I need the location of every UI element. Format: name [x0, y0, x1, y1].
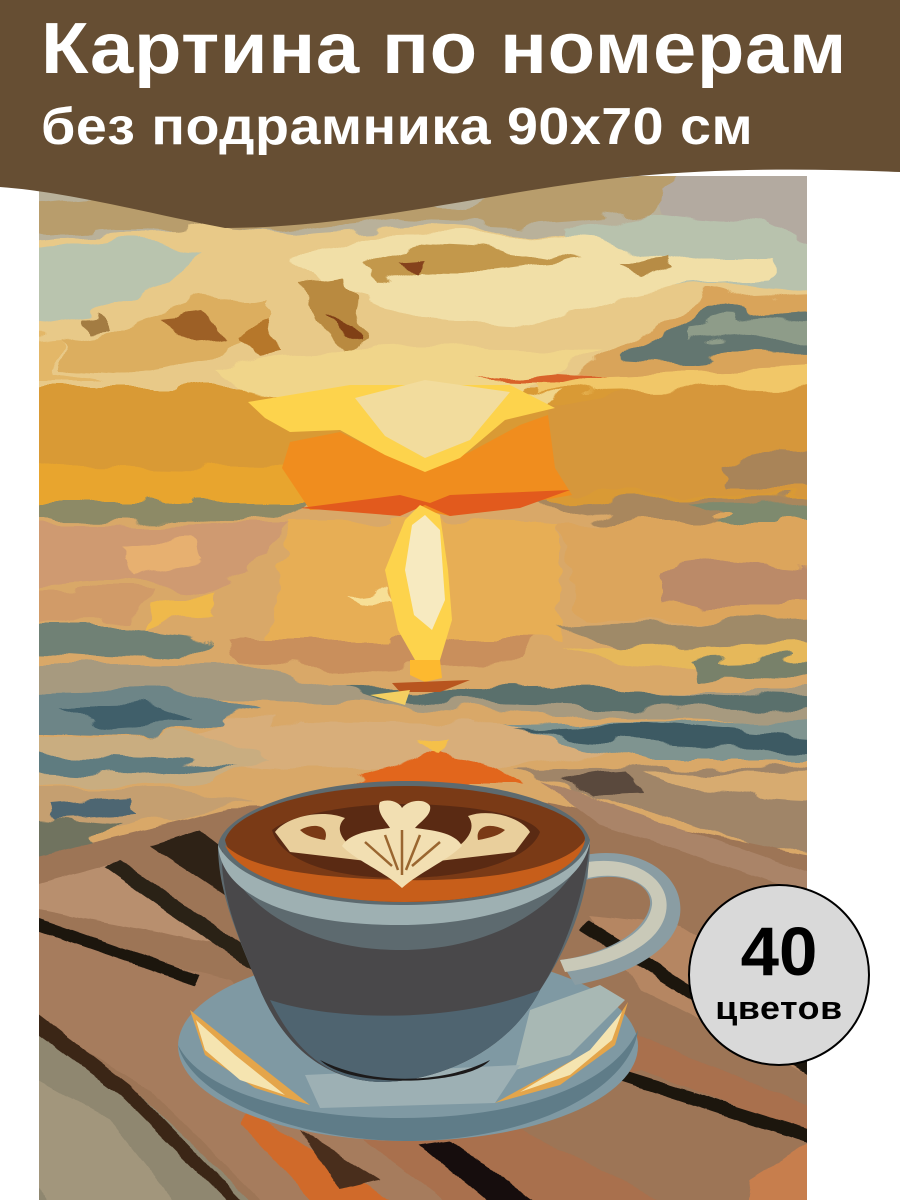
badge: 40 colours: 40 — [741, 913, 817, 990]
orange horizon band — [39, 343, 807, 506]
saucer — [178, 972, 638, 1141]
wooden table — [20, 780, 830, 1200]
dark cloud at right — [578, 286, 807, 378]
sea — [39, 490, 807, 856]
painting: coffee cup at sunset — [39, 176, 807, 1200]
sun reflection — [370, 505, 470, 705]
header banner — [0, 0, 900, 228]
sun glow — [248, 380, 572, 516]
title: Картина по номерам — [41, 9, 847, 89]
subtitle: без подрамника 90х70 см — [41, 98, 753, 156]
cup — [218, 781, 680, 1082]
latte art — [272, 801, 540, 888]
badge: 40 colours: цветов — [715, 990, 843, 1026]
badge: 40 colours — [688, 884, 870, 1066]
sky background — [39, 176, 807, 392]
